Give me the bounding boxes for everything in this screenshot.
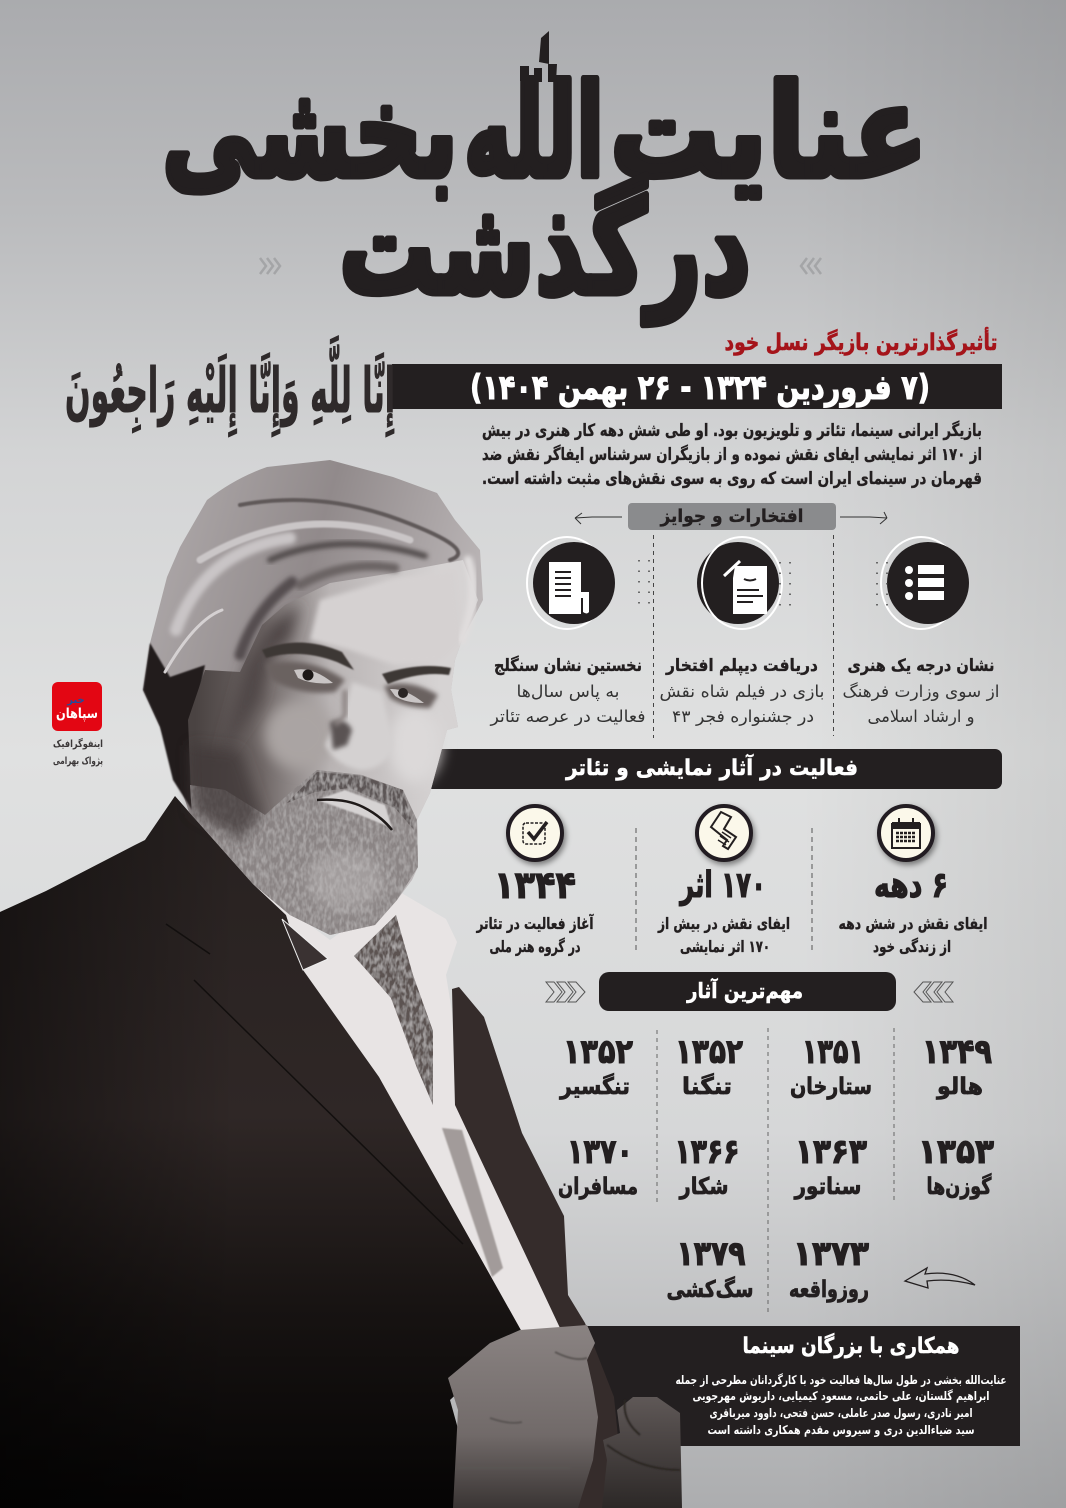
title: بخشی — [162, 58, 458, 207]
work: Mosaferan: ۱۳۷۰ — [567, 1132, 633, 1172]
activity band: فعالیت در آثار نمایشی و تئاتر — [565, 753, 858, 781]
intro text — [482, 420, 982, 489]
stat: 170 works — [657, 806, 790, 956]
eye shadows — [265, 662, 438, 708]
icon: checkbox — [508, 806, 562, 860]
work: Senator: سناتور — [794, 1174, 862, 1200]
work: Roozvaghe — [789, 1234, 869, 1303]
icon: left title chevrons — [260, 258, 280, 274]
arrow: awards left — [575, 513, 622, 524]
work: Halo — [922, 1032, 992, 1100]
nose — [325, 682, 394, 770]
panel: collaboration: همکاری با بزرگان سینما — [742, 1332, 960, 1359]
work: Roozvaghe: ۱۳۷۳ — [793, 1234, 869, 1274]
arrow: works continue — [905, 1268, 975, 1288]
work: Shekar: ۱۳۶۶ — [674, 1132, 740, 1172]
icon: right title chevrons — [801, 258, 821, 274]
jacket — [0, 796, 522, 1508]
works heading — [599, 972, 896, 1011]
work: Tangsir: تنگسیر — [559, 1073, 630, 1100]
work: Sattar Khan: ستارخان — [790, 1074, 872, 1100]
awards heading: افتخارات و جوایز — [660, 506, 804, 527]
date band: (۷ فروردین ۱۳۲۴ - ۲۶ بهمن ۱۴۰۴) — [470, 368, 930, 408]
work: Roozvaghe: روزواقعه — [789, 1277, 869, 1303]
beard — [190, 770, 418, 935]
stat: 1344: ۱۳۴۴ — [494, 863, 576, 907]
work: Sattar Khan — [790, 1032, 872, 1100]
head silhouette — [143, 460, 483, 935]
shirt fold shadow — [442, 1128, 503, 1277]
activity band — [400, 749, 1002, 789]
stat: six decades: از زندگی خود — [873, 937, 951, 956]
lapel lines — [166, 924, 463, 1244]
panel: award 1: از سوی وزارت فرهنگ — [842, 682, 1000, 702]
awards heading — [628, 503, 836, 530]
forehead light — [310, 570, 462, 665]
title: عنایت — [610, 58, 928, 207]
icon: diploma — [697, 537, 790, 629]
logo caption: پژواک بهرامی — [53, 756, 103, 767]
right jacket panel — [452, 987, 625, 1508]
subtitle: تأثیرگذارترین بازیگر نسل خود — [724, 326, 998, 356]
logo: خبر — [66, 695, 85, 706]
chin highlight — [307, 850, 383, 910]
second hand — [602, 1397, 682, 1508]
work: Tangna: تنگنا — [682, 1073, 732, 1100]
lips — [317, 790, 392, 828]
work: Gavazn-ha — [918, 1132, 994, 1200]
icon: right chevrons — [914, 982, 953, 1002]
portrait — [0, 460, 682, 1508]
work: Sag-koshi — [666, 1234, 754, 1303]
panel: award 3: فعالیت در عرصه تئاتر — [489, 707, 646, 727]
work: Sag-koshi: ۱۳۷۹ — [676, 1234, 746, 1274]
stat: 1344: آغاز فعالیت در تئاتر — [476, 913, 594, 933]
title — [162, 31, 928, 325]
work: Gavazn-ha: گوزن‌ها — [926, 1173, 992, 1200]
cravat — [354, 915, 433, 1105]
panel: award 2: بازی در فیلم شاه نقش — [660, 682, 824, 702]
intro text: از ۱۷۰ اثر نمایشی ایفای نقش نموده و از بازیگران سرشناس ایفاگر نقش ضد — [482, 444, 982, 465]
temple shadow — [220, 605, 300, 760]
panel: award 2: دریافت دیپلم افتخار — [665, 656, 818, 676]
work: Tangna — [675, 1032, 743, 1100]
right cheek light — [389, 707, 441, 783]
head — [143, 460, 483, 935]
panel: award 1: نشان درجه یک هنری — [848, 656, 994, 676]
works heading: مهم‌ترین آثار — [686, 978, 803, 1003]
panel: award 3: نخستین نشان سنگلج — [494, 655, 642, 676]
work: Sattar Khan: ۱۳۵۱ — [802, 1032, 864, 1072]
icon: document — [527, 537, 649, 629]
icon: left chevrons — [546, 982, 585, 1002]
stat: 1344: در گروه هنر ملی — [490, 937, 580, 956]
hair strands — [165, 500, 473, 672]
panel: award 3 — [489, 537, 649, 727]
icon: calendar — [879, 806, 933, 860]
title: درگذشت — [339, 172, 751, 325]
eyes — [294, 669, 424, 703]
stat: 1344 — [476, 806, 594, 956]
arrow: awards right — [840, 512, 887, 524]
beard left shade — [190, 745, 262, 840]
text: إِنَّا لِلَّهِ وَإِنَّا إِلَيْهِ رَاجِعُونَ — [65, 334, 395, 438]
title: الله — [464, 58, 604, 207]
date band — [392, 364, 1002, 409]
panel: collaboration: سید ضیاءالدین دری و سیروس مقدم همکاری داشته است — [708, 1423, 974, 1438]
work: Halo: هالو — [936, 1074, 983, 1100]
work: Tangsir — [559, 1032, 633, 1100]
stat: six decades — [838, 806, 988, 956]
shirt — [250, 880, 570, 1340]
stat: six decades: ۶ دهه — [874, 865, 948, 906]
panel: award 1: و ارشاد اسلامی — [868, 707, 974, 727]
jacket left shade — [0, 796, 522, 1508]
brows — [262, 642, 451, 684]
logo: سپاهان — [56, 706, 98, 722]
stat: 170 works: ۱۷۰ اثر نمایشی — [680, 937, 770, 956]
panel: award 3: به پاس سال‌ها — [516, 682, 620, 702]
work: Tangsir: ۱۳۵۲ — [563, 1032, 633, 1072]
panel: award 2 — [660, 537, 824, 727]
logo caption — [53, 737, 103, 767]
logo caption: اینفوگرافیک — [53, 737, 103, 750]
works list — [558, 1032, 994, 1303]
stat: six decades: ایفای نقش در شش دهه — [838, 914, 988, 933]
logo — [52, 682, 102, 731]
work: Sag-koshi: سگ‌کشی — [666, 1276, 754, 1303]
work: Senator: ۱۳۶۳ — [795, 1132, 867, 1172]
mouth line — [317, 800, 392, 830]
panel: collaboration: امیر نادری، رسول صدر عاملی، حسن فتحی، داوود میرباقری — [710, 1406, 972, 1421]
work: Senator — [794, 1132, 867, 1200]
collar fold — [282, 919, 328, 970]
dark back of head — [143, 643, 205, 810]
face — [188, 560, 478, 935]
work: Tangna: ۱۳۵۲ — [675, 1032, 743, 1072]
cheek light — [264, 701, 336, 769]
panel: collaboration: ابراهیم گلستان، علی حاتمی، مسعود کیمیایی، داریوش مهرجویی — [692, 1389, 990, 1404]
panel: award 2: در جشنواره فجر ۴۳ — [672, 707, 814, 727]
work: Gavazn-ha: ۱۳۵۳ — [918, 1132, 994, 1172]
icon: scroll — [697, 806, 751, 860]
stat: 170 works: ایفای نقش در بیش از — [657, 914, 790, 933]
hand — [448, 1325, 598, 1508]
work: Mosaferan — [558, 1132, 638, 1200]
icon: list — [877, 537, 969, 629]
panel: award 1 — [842, 537, 1000, 727]
panel: collaboration — [560, 1326, 1020, 1446]
work: Mosaferan: مسافران — [558, 1174, 638, 1200]
work: Shekar — [674, 1132, 740, 1200]
work: Shekar: شکار — [679, 1174, 728, 1200]
stat: 170 works: ۱۷۰ اثر — [679, 865, 766, 906]
work: Halo: ۱۳۴۹ — [922, 1032, 992, 1072]
moustache dark — [287, 772, 414, 830]
